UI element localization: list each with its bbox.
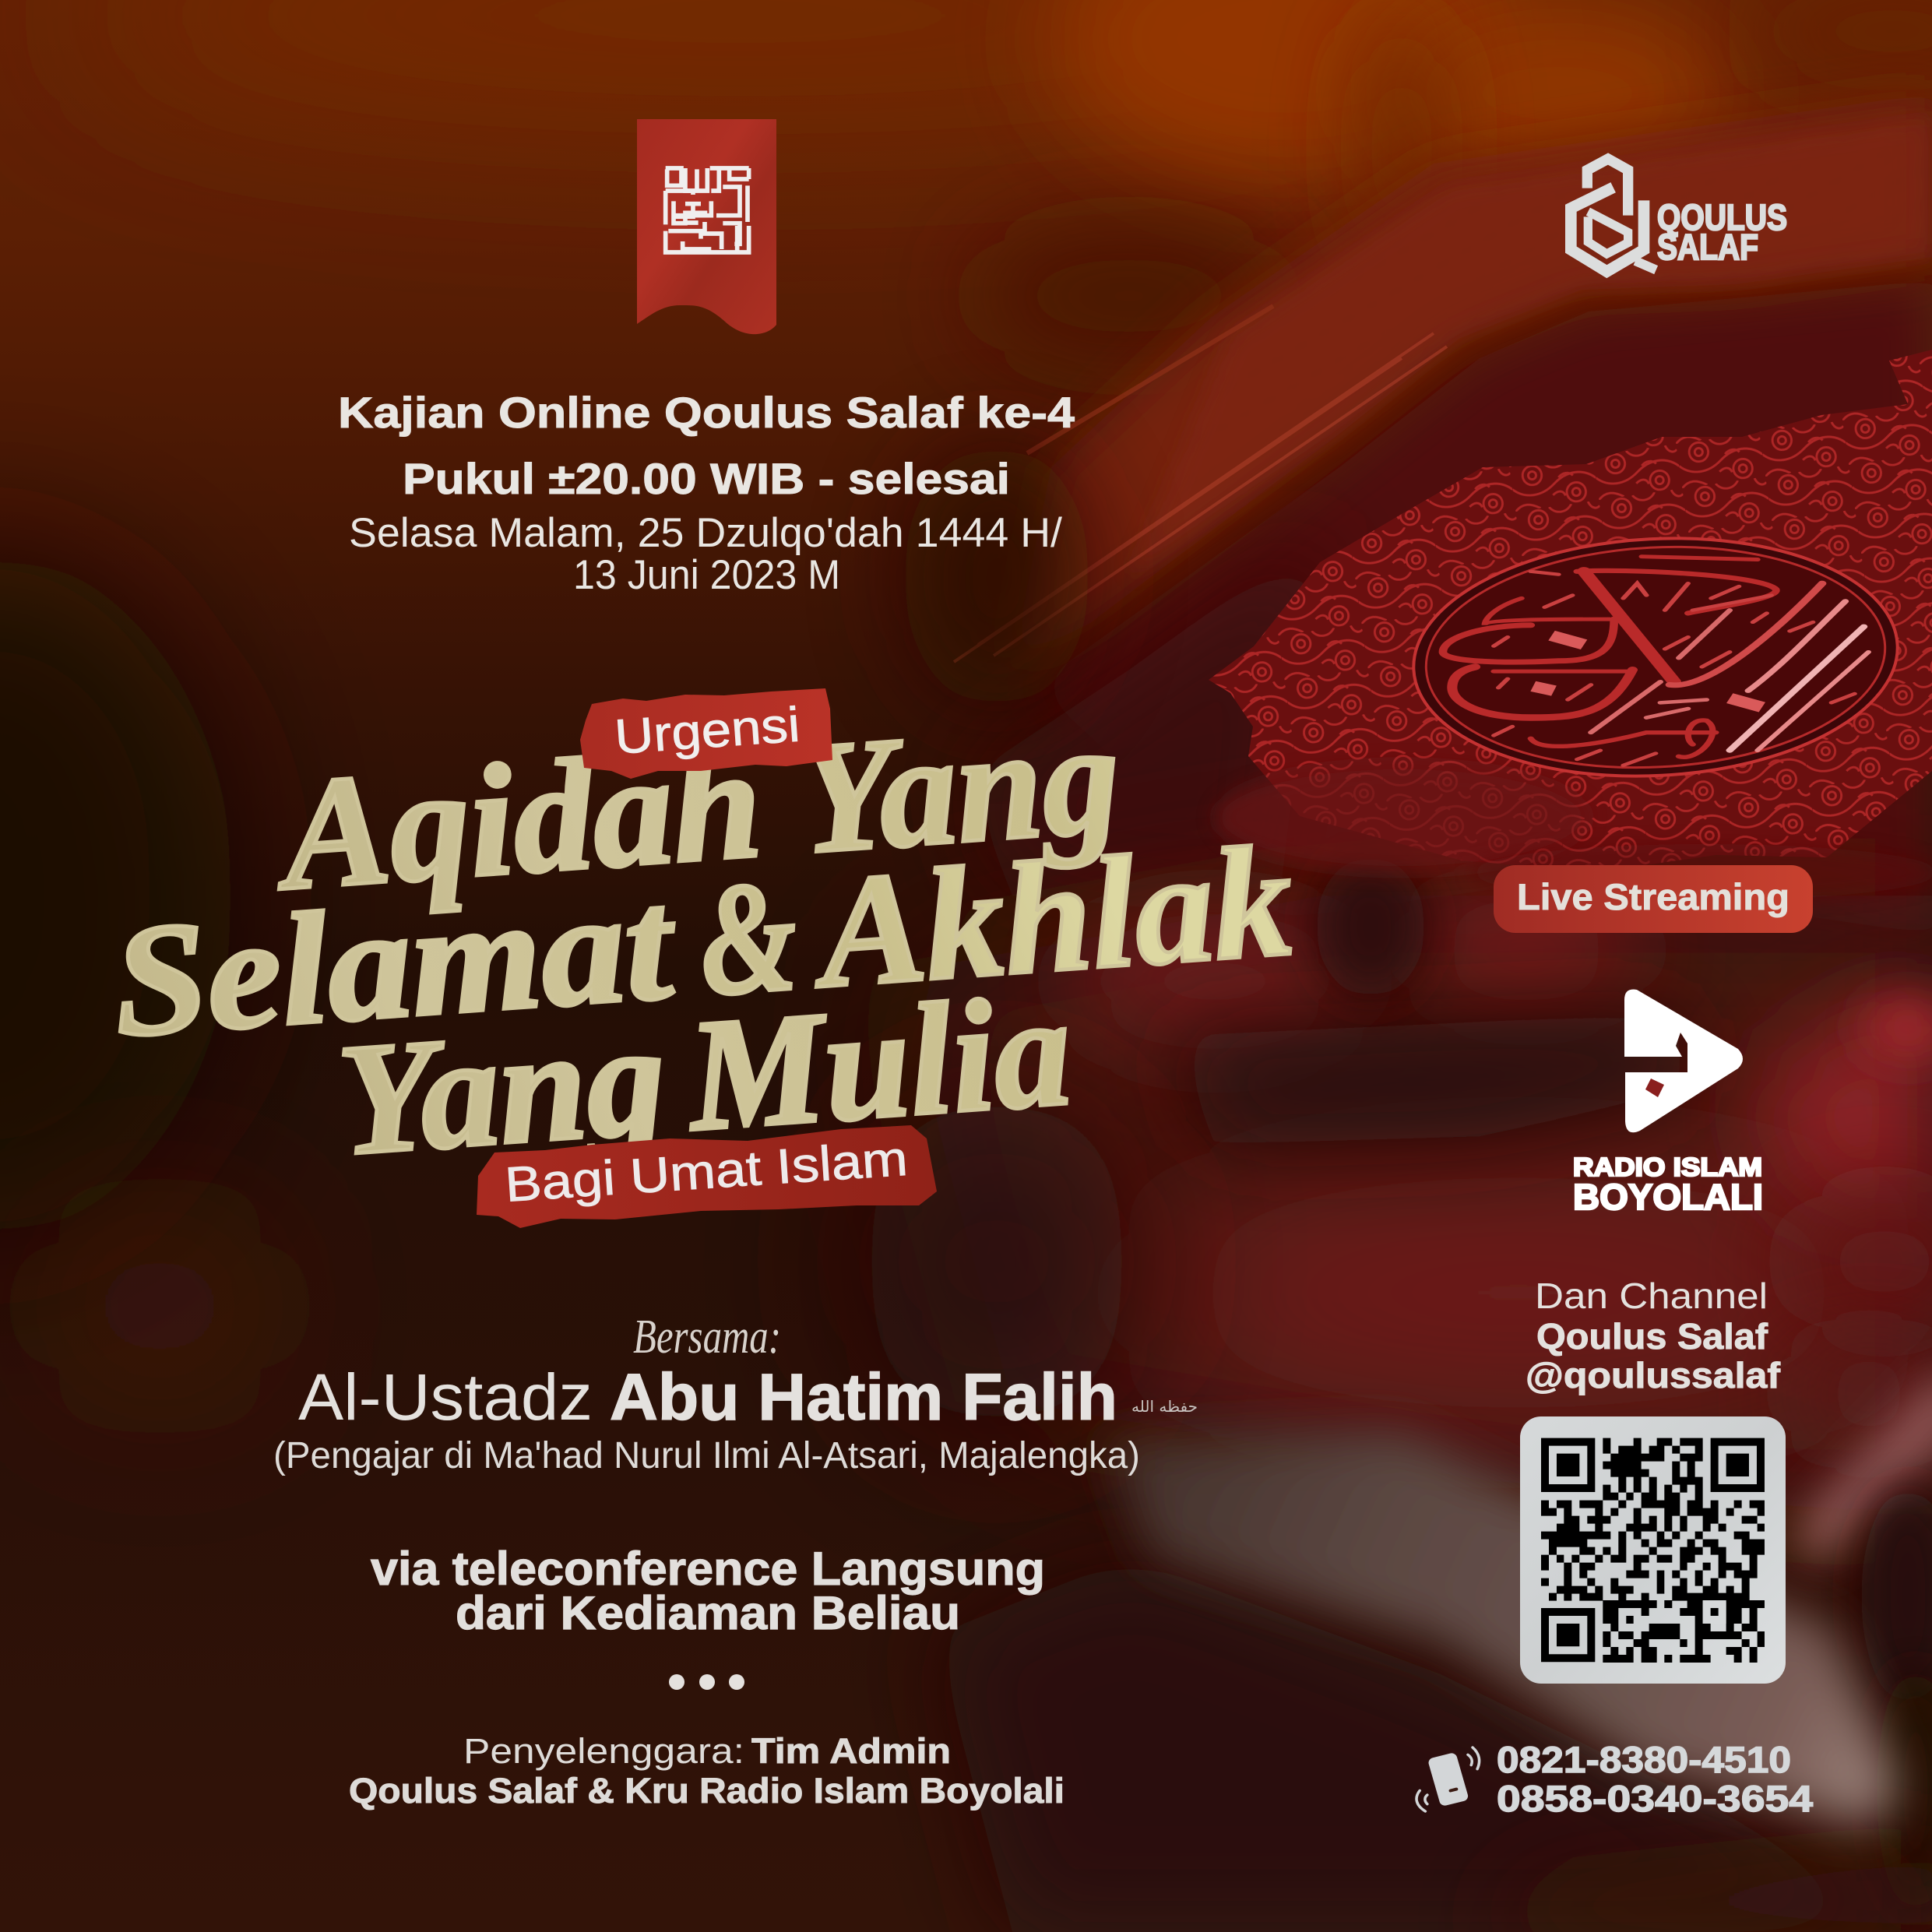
speaker title: Al-Ustadz: [298, 1360, 593, 1434]
channel info: [1526, 1276, 1781, 1395]
ribbon bookmark: [637, 119, 776, 334]
heading: event name: Kajian Online Qoulus Salaf ke-4: [338, 388, 1075, 437]
title line 3: Mulia: [681, 962, 1076, 1165]
contact phone numbers: [1416, 1739, 1813, 1819]
logo mark: [1571, 159, 1656, 272]
event date second line: 13 Juni 2023 M: [573, 552, 840, 598]
organiser credits: [349, 1731, 1065, 1811]
pill: live streaming: [1494, 865, 1813, 933]
title line 1: Aqidah: [269, 714, 767, 924]
phone numbers: 0858-0340-3654: [1497, 1778, 1813, 1819]
logo: qoulus salaf: [1571, 159, 1787, 272]
three dots separator: [669, 1674, 744, 1690]
radio wordmark: RADIO ISLAM: [1573, 1153, 1762, 1181]
title line 1: [269, 688, 1125, 924]
event date: Selasa Malam, 25 Dzulqo'dah 1444 H/: [349, 510, 1062, 556]
qr code modules: [1541, 1438, 1765, 1662]
tag: Bagi Umat Islam: [477, 1125, 937, 1228]
cover dark red: [1036, 280, 1932, 934]
channel info: Dan Channel: [1535, 1276, 1768, 1316]
speaker name: Abu Hatim Falih: [610, 1360, 1117, 1434]
title line 3: [333, 962, 1076, 1189]
top orange glow: [78, 0, 1932, 366]
honorific: حفظه الله: [1131, 1397, 1198, 1416]
channel info: Qoulus Salaf: [1536, 1316, 1768, 1357]
grey blurred page band: [1106, 1433, 1900, 1826]
main title: [107, 688, 1297, 1189]
icon: phone: [1416, 1747, 1480, 1811]
tag: Bagi Umat Islam: Bagi Umat Islam: [503, 1131, 910, 1212]
qr code card: [1520, 1416, 1786, 1684]
event time: Pukul ±20.00 WIB - selesai: [403, 454, 1010, 503]
speaker affiliation: (Pengajar di Ma'had Nurul Ilmi Al-Atsari, Majalengka): [273, 1435, 1140, 1476]
logo: radio islam boyolali: [1573, 990, 1763, 1217]
organiser credits: Tim Admin: [751, 1731, 951, 1771]
title line 2: [107, 812, 1297, 1071]
teleconference note: [371, 1543, 1045, 1639]
speaker block: [273, 1311, 1198, 1476]
title line 2: Selamat: [107, 855, 682, 1071]
quran medallion: [1209, 350, 1932, 900]
title line 2: &: [694, 846, 802, 1029]
quran spine ornament band: [903, 93, 1932, 709]
logo wordmark: [1657, 197, 1787, 267]
pill: live streaming: Live Streaming: [1517, 876, 1789, 917]
radio wordmark: BOYOLALI: [1573, 1177, 1763, 1217]
medallion oval with calligraphy: [1407, 526, 1904, 788]
organiser credits: Qoulus Salaf & Kru Radio Islam Boyolali: [349, 1771, 1065, 1811]
teleconference note: dari Kediaman Beliau: [456, 1587, 960, 1639]
icon: kufic bismillah: [666, 168, 749, 252]
label: Bersama: Bersama:: [633, 1311, 781, 1364]
phone numbers: [1497, 1739, 1813, 1819]
icon: diamond dot: [1645, 1079, 1664, 1097]
title line 2: Akhlak: [806, 812, 1297, 1022]
title line 1: Yang: [794, 688, 1125, 888]
icon: play triangle with ba letter: [1624, 990, 1743, 1132]
organiser credits: Penyelenggara:: [463, 1731, 744, 1771]
teleconference note: via teleconference Langsung: [371, 1543, 1045, 1595]
title line 3: Yang: [333, 990, 670, 1189]
logo wordmark: SALAF: [1657, 227, 1758, 267]
tag: Urgensi: [580, 688, 832, 779]
event info text block: [338, 388, 1075, 598]
lower right blurred pages: [896, 896, 1932, 1519]
tag: Urgensi: Urgensi: [613, 698, 801, 765]
channel info: @qoulussalaf: [1526, 1355, 1781, 1395]
logo wordmark: QOULUS: [1657, 197, 1787, 238]
radio wordmark: [1573, 1153, 1763, 1217]
phone numbers: 0821-8380-4510: [1497, 1739, 1791, 1780]
